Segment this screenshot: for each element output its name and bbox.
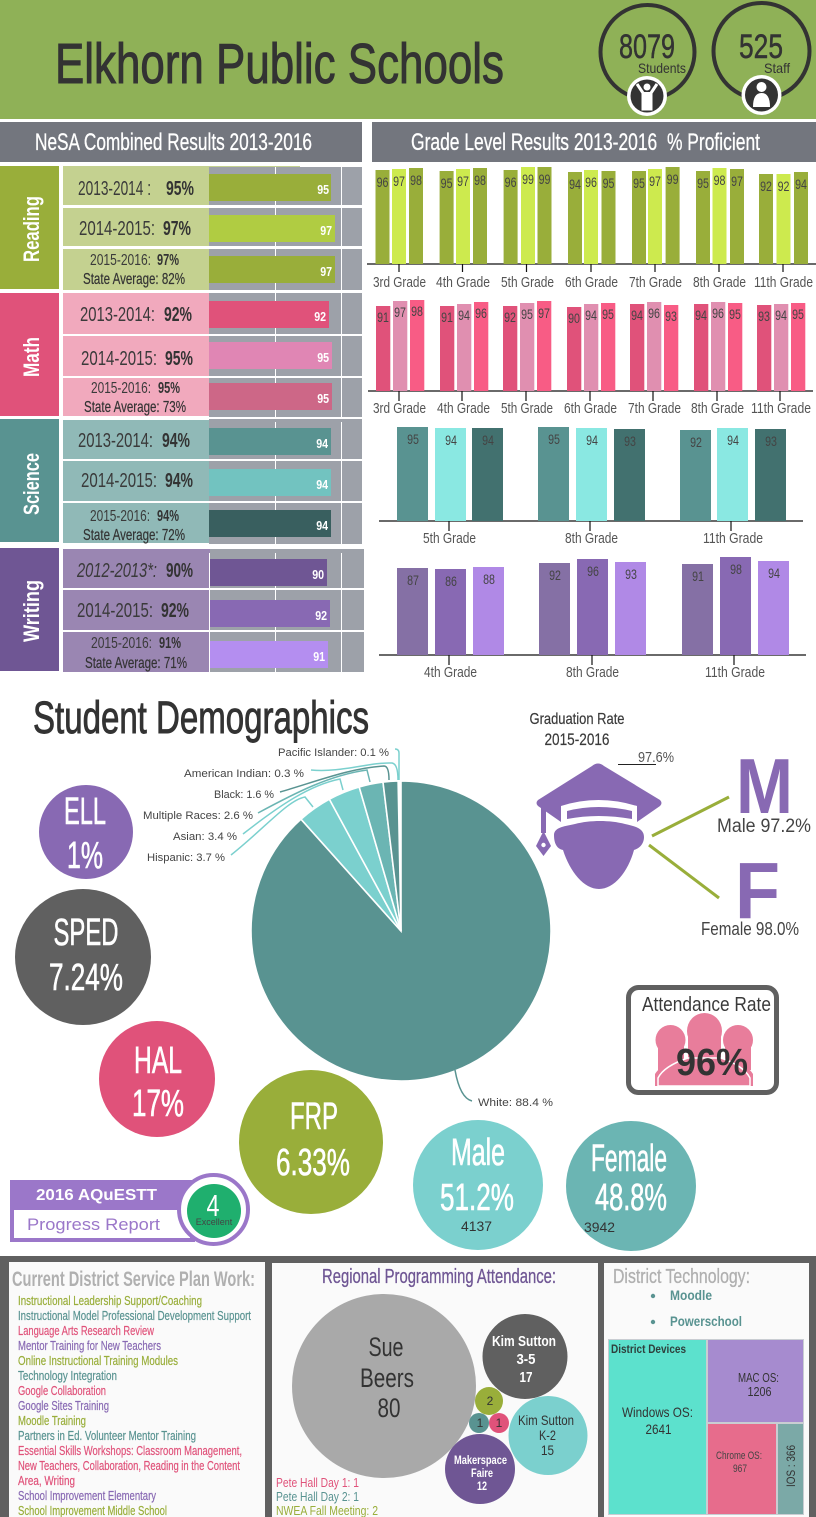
service plan list: Area, Writing [18, 1473, 75, 1488]
bar chart: math by grade: 8th Grade [691, 400, 744, 417]
bar chart: writing by grade: 93 [625, 567, 637, 582]
stat circle: FRP: FRP [290, 1096, 338, 1138]
panel: reading results: 97% [163, 218, 191, 240]
bar chart: math by grade: 94 [585, 308, 597, 323]
bar chart: math by grade: 91 [441, 310, 453, 325]
bubble: Kim Sutton K-2: 15 [541, 1442, 554, 1458]
panel: district technology: District Technology: [613, 1266, 750, 1288]
panel: reading results: 2014-2015: [79, 218, 155, 240]
bar chart: writing by grade: 4th Grade [424, 664, 477, 681]
bubble: Kim Sutton K-2 [508, 1396, 588, 1475]
bar chart: math by grade: 95 [521, 307, 533, 322]
bar chart: writing by grade [379, 557, 806, 681]
bar chart: reading by grade: 8th Grade [693, 274, 746, 291]
female graduation rate: Female 98.0% [701, 919, 799, 939]
stat circle: ELL [39, 785, 133, 879]
panel: regional programming attendance [272, 1263, 598, 1517]
connector: male [652, 797, 729, 836]
bubble: Kim Sutton 3-5 [482, 1314, 568, 1399]
service plan list: New Teachers, Collaboration, Reading in the Content [18, 1458, 240, 1473]
bar chart: reading by grade: 95 [603, 176, 614, 191]
staff badge: 525 [739, 28, 783, 66]
stat circle: FRP [239, 1070, 383, 1214]
bar chart: science by grade: 5th Grade [423, 530, 476, 547]
stat circle: HAL [99, 1021, 215, 1137]
panel: writing results: 92 [315, 608, 327, 623]
title: Elkhorn Public Schools [55, 32, 504, 96]
bar chart: math by grade: 96 [475, 306, 487, 321]
bar chart: writing by grade: 11th Grade [705, 664, 765, 681]
panel: district service plan work: Current District Service Plan Work: [12, 1268, 255, 1291]
bar chart: math by grade: 3rd Grade [373, 400, 426, 417]
bar chart: science by grade: 94 [482, 433, 494, 448]
bar chart: science by grade [379, 427, 803, 547]
bar chart: science by grade: 92 [690, 435, 702, 450]
bubble: Pete Hall day 2 [469, 1413, 489, 1433]
graduation rate: 97.6% [638, 749, 674, 766]
bubble: Kim Sutton K-2: Kim Sutton [518, 1412, 574, 1428]
bar chart: reading by grade: 98 [410, 173, 422, 188]
panel: reading results: State Average: 82% [83, 271, 185, 288]
bar chart: science by grade: 11th Grade [703, 530, 763, 547]
bar chart: reading by grade: 96 [505, 175, 517, 190]
stat circle: female students: 48.8% [595, 1177, 667, 1219]
bar chart: reading by grade: 97 [731, 174, 743, 189]
bar chart: science by grade: 95 [407, 432, 419, 447]
bar chart: science by grade: 95 [548, 432, 560, 447]
bar chart: reading by grade: 92 [760, 179, 772, 194]
graduation rate: 2015-2016 [544, 730, 610, 749]
bar chart: reading by grade: 96 [585, 175, 597, 190]
service plan list: School Improvement Elementary [18, 1488, 156, 1503]
bar chart: science by grade: 93 [765, 434, 777, 449]
panel: writing results: State Average: 71% [85, 655, 187, 672]
bubble: Pete Hall day 1: 1 [496, 1416, 503, 1430]
bar chart: math by grade: 5th Grade [501, 400, 553, 417]
students badge: Students [638, 60, 686, 76]
panel: math results: 95% [165, 348, 193, 370]
service plan list: Google Sites Training [18, 1398, 109, 1413]
treemap: district devices: 1206 [748, 1384, 772, 1399]
panel: math results: State Average: 73% [84, 399, 186, 416]
panel: math results: 95 [317, 391, 329, 406]
panel: math results: 2013-2014: [80, 304, 155, 326]
bar chart: reading by grade: 6th Grade [565, 274, 618, 291]
stat circle: male students: 51.2% [440, 1177, 514, 1219]
bubble: Sue Beers: 80 [378, 1393, 400, 1423]
service plan list: Language Arts Research Review [18, 1323, 154, 1338]
bubble: Sue Beers: Beers [360, 1363, 414, 1393]
bar chart: math by grade: 94 [695, 308, 707, 323]
panel: science results: 2015-2016: [90, 508, 150, 525]
stat circle: ELL: ELL [64, 791, 106, 833]
bar chart: math by grade: 95 [792, 307, 804, 322]
bar chart: reading by grade: 92 [778, 179, 789, 194]
panel: writing results: 2015-2016: [91, 635, 152, 652]
stat circle: SPED: SPED [54, 912, 118, 954]
bar chart: reading by grade: 98 [474, 173, 486, 188]
panel: science results: 94 [316, 436, 328, 451]
bubble: Kim Sutton 3-5: 3-5 [516, 1351, 536, 1368]
panel: math results: 92 [314, 309, 326, 324]
bar chart: math by grade: 93 [758, 309, 770, 324]
bar chart: writing by grade: 92 [549, 568, 561, 583]
bar chart: writing by grade: 94 [768, 566, 780, 581]
panel: science results: 94 [316, 518, 328, 533]
stat circle: SPED [15, 889, 151, 1025]
bar chart: reading by grade: 95 [633, 176, 645, 191]
bar chart: writing by grade: 98 [730, 562, 742, 577]
treemap: district devices: Windows OS: [622, 1404, 693, 1420]
stat circle: male students: 4137 [461, 1218, 492, 1234]
bar chart: reading by grade: 97 [393, 174, 405, 189]
AQuESTT progress report badge: Excellent [196, 1217, 233, 1227]
bar chart: writing by grade: 88 [483, 572, 495, 587]
bar chart: writing by grade: 96 [587, 564, 599, 579]
bar chart: writing by grade: 91 [692, 569, 704, 584]
bubble: Pete Hall day 2: 1 [477, 1416, 484, 1430]
treemap: district devices: 967 [733, 1463, 747, 1475]
attendance rate box: Attendance Rate [642, 994, 771, 1016]
bar chart: reading by grade: 7th Grade [629, 274, 682, 291]
bar chart: math by grade: 96 [648, 306, 660, 321]
bar chart: math by grade: 7th Grade [628, 400, 681, 417]
bar chart: math by grade: 93 [665, 309, 677, 324]
bar chart: reading by grade: 94 [795, 177, 807, 192]
panel: writing results: 2012-2013*: [76, 560, 157, 582]
panel: science results: State Average: 72% [83, 527, 185, 544]
legend [276, 1475, 378, 1517]
female graduation rate: F [735, 846, 780, 935]
service plan list: Instructional Leadership Support/Coaching [18, 1293, 202, 1308]
students badge: 8079 [619, 28, 675, 66]
bar chart: science by grade: 94 [727, 433, 739, 448]
treemap: district devices: IOS : 366 [784, 1445, 798, 1487]
panel: reading results: 2015-2016: [90, 252, 151, 269]
staff badge [714, 3, 810, 115]
bar chart: reading by grade: 99 [522, 172, 534, 187]
bar chart: reading by grade: 4th Grade [436, 274, 490, 291]
treemap: district devices: Chrome OS: [716, 1450, 762, 1462]
heading: student demographics: Student Demographics [33, 692, 369, 743]
bar chart: reading by grade: 5th Grade [501, 274, 554, 291]
bubble: Sue Beers [292, 1294, 476, 1478]
students badge [600, 5, 694, 116]
bar chart: reading by grade: 99 [539, 172, 550, 187]
treemap: district devices: District Devices [611, 1342, 686, 1356]
bubble: Kim Sutton K-2: K-2 [539, 1427, 556, 1443]
panel: science results: 2013-2014: [78, 430, 153, 452]
stat circle: female students: 3942 [584, 1219, 615, 1235]
panel: reading results: 97% [157, 252, 179, 269]
panel: writing results: 90 [312, 567, 324, 582]
section header: NeSA combined results: NeSA Combined Results 2013-2016 [35, 129, 312, 156]
panel: writing results: Writing [19, 580, 44, 642]
bubble: Makerspace Faire: Faire [471, 1466, 493, 1480]
bar chart: math by grade: 92 [504, 310, 516, 325]
bar chart: reading by grade: 98 [714, 173, 725, 188]
bar chart: math by grade: 96 [712, 306, 724, 321]
stat circle: SPED: 7.24% [49, 957, 123, 999]
treemap: district devices [608, 1339, 804, 1515]
bar chart: reading by grade: 3rd Grade [373, 274, 426, 291]
bar chart: reading by grade: 97 [649, 174, 661, 189]
panel: science results: 94% [157, 508, 179, 525]
service plan list: Essential Skills Workshops: Classroom Management, [18, 1443, 242, 1458]
bar chart: math by grade: 94 [458, 308, 470, 323]
graduation rate [530, 711, 674, 889]
graduation rate: Graduation Rate [530, 711, 625, 728]
bottom band [0, 1256, 816, 1517]
panel: science results: 94 [316, 477, 328, 492]
panel: math results: 2015-2016: [91, 380, 151, 397]
panel: writing results [0, 548, 364, 675]
bubble: Makerspace Faire: 12 [477, 1479, 487, 1493]
bar chart: reading by grade: 95 [441, 176, 453, 191]
bar chart: reading by grade: 96 [377, 175, 388, 190]
bubble: Makerspace Faire: Makerspace [454, 1453, 507, 1467]
bar chart: science by grade: 94 [586, 433, 598, 448]
AQuESTT progress report badge: 2016 AQuESTT [36, 1187, 157, 1204]
pie chart: student ethnicity: White: 88.4 % [478, 1097, 553, 1109]
treemap: district devices: 2641 [646, 1421, 672, 1437]
bubble: Makerspace Faire [445, 1434, 515, 1504]
stat circle: female students [566, 1121, 696, 1251]
stat circle: ELL: 1% [67, 835, 103, 877]
panel: math results: Math [19, 337, 44, 377]
stat circle: male students [413, 1120, 543, 1250]
bubble: NWEA fall meeting: 2 [487, 1394, 494, 1408]
section header: grade level results [372, 122, 816, 162]
panel: reading results [0, 166, 362, 290]
panel: reading results: 95% [166, 178, 194, 200]
icon: graduate with cap [536, 764, 662, 889]
service plan list: Google Collaboration [18, 1383, 106, 1398]
AQuESTT progress report badge: Progress Report [27, 1215, 160, 1234]
panel: reading results: 95 [317, 182, 329, 197]
bar chart: math by grade: 91 [377, 310, 389, 325]
panel: reading results: 2013-2014 : [78, 178, 151, 200]
service plan list: Technology Integration [18, 1368, 117, 1383]
bar chart: math by grade: 95 [729, 307, 741, 322]
service plan list: Online Instructional Training Modules [18, 1353, 178, 1368]
icon: adult and child [742, 75, 782, 115]
panel: science results: 94% [162, 430, 190, 452]
panel: district technology: Moodle [670, 1287, 712, 1303]
pie chart: student ethnicity [143, 747, 553, 1109]
stat circle: male students: Male [451, 1132, 505, 1174]
bar chart: reading by grade: 99 [667, 172, 679, 187]
male graduation rate: M [736, 742, 793, 830]
panel: science results: 94% [165, 470, 193, 492]
panel: regional programming attendance: Regional Programming Attendance: [322, 1266, 556, 1288]
pie chart: student ethnicity: Multiple Races: 2.6 % [143, 810, 253, 822]
bar chart: math by grade: 90 [568, 311, 580, 326]
service plan list: Moodle Training [18, 1413, 86, 1428]
stat circle: female students: Female [591, 1138, 667, 1180]
stat circle: FRP: 6.33% [276, 1142, 350, 1184]
bar chart: science by grade: 93 [624, 434, 636, 449]
pie chart: student ethnicity: Black: 1.6 % [214, 789, 274, 801]
bar chart: science by grade: 94 [445, 433, 457, 448]
pie chart: student ethnicity: Hispanic: 3.7 % [147, 852, 225, 864]
legend: Pete Hall Day 2: 1 [276, 1489, 359, 1504]
bar chart: math by grade: 94 [775, 308, 787, 323]
bubble: NWEA fall meeting [475, 1387, 503, 1415]
bar chart: math by grade: 98 [411, 304, 423, 319]
attendance rate box [628, 988, 776, 1092]
service plan list: Instructional Model Professional Development Support [18, 1308, 251, 1323]
bar chart: reading by grade: 97 [457, 174, 469, 189]
section header: NeSA combined results [0, 122, 362, 162]
female graduation rate [701, 846, 799, 939]
staff badge: Staff [764, 60, 790, 76]
bar chart: writing by grade: 87 [407, 573, 419, 588]
panel: math results: 2014-2015: [81, 348, 157, 370]
panel: district service plan work [9, 1262, 265, 1517]
bar chart: science by grade: 8th Grade [565, 530, 618, 547]
panel: reading results: 97 [320, 223, 332, 238]
AQuESTT progress report badge [10, 1175, 248, 1244]
panel: district technology [604, 1263, 809, 1517]
panel: math results [0, 293, 362, 417]
stat circle: HAL: 17% [132, 1083, 184, 1125]
connector: female [649, 845, 719, 898]
panel: writing results: 92% [161, 600, 189, 622]
bar chart: math by grade: 97 [394, 305, 406, 320]
bar chart: writing by grade: 8th Grade [566, 664, 619, 681]
stat circle: HAL: HAL [134, 1040, 182, 1082]
bar chart: math by grade [368, 300, 813, 417]
attendance rate box: 96% [676, 1042, 748, 1084]
pie chart: student ethnicity: American Indian: 0.3 % [184, 768, 304, 780]
bubble: Pete Hall day 1 [489, 1413, 509, 1433]
bar chart: math by grade: 94 [631, 308, 643, 323]
bar chart: reading by grade: 94 [569, 177, 581, 192]
header banner [0, 0, 816, 119]
panel: math results: 95 [317, 350, 329, 365]
icon: group of people [655, 1013, 753, 1086]
AQuESTT progress report badge: 4 [206, 1188, 220, 1223]
panel: writing results: 2014-2015: [77, 600, 153, 622]
panel: district technology: Powerschool [670, 1313, 742, 1329]
panel: writing results: 90% [166, 560, 193, 582]
pie chart: student ethnicity: Asian: 3.4 % [173, 831, 237, 843]
treemap: district devices: MAC OS: [738, 1370, 779, 1385]
legend: Pete Hall Day 1: 1 [276, 1475, 359, 1490]
service plan list: Mentor Training for New Teachers [18, 1338, 161, 1353]
panel: reading results: 97 [320, 264, 332, 279]
bubble: Kim Sutton 3-5: 17 [520, 1369, 532, 1386]
panel: math results: 95% [158, 380, 180, 397]
bubble: Kim Sutton 3-5: Kim Sutton [492, 1333, 556, 1350]
male graduation rate [717, 742, 811, 837]
male graduation rate: Male 97.2% [717, 816, 811, 837]
icon: child with raised arms [627, 76, 667, 116]
bar chart: math by grade: 4th Grade [437, 400, 490, 417]
panel: writing results: 91 [313, 649, 325, 664]
bar chart: math by grade: 97 [538, 306, 550, 321]
service plan list: Partners in Ed. Volunteer Mentor Training [18, 1428, 196, 1443]
panel: science results: Science [19, 453, 44, 515]
bubble: Sue Beers: Sue [368, 1332, 404, 1362]
bar chart: writing by grade: 86 [445, 574, 457, 589]
panel: science results: 2014-2015: [81, 470, 157, 492]
panel: reading results: Reading [19, 196, 44, 262]
panel: writing results: 91% [159, 635, 181, 652]
bar chart: reading by grade: 95 [697, 176, 709, 191]
panel: math results: 92% [164, 304, 192, 326]
panel: science results [0, 419, 362, 544]
service plan list [18, 1293, 251, 1517]
bar chart: math by grade: 95 [602, 307, 614, 322]
bar chart: reading by grade [367, 167, 816, 291]
bar chart: math by grade: 6th Grade [564, 400, 617, 417]
pie chart: student ethnicity: Pacific Islander: 0.1 % [278, 747, 389, 759]
